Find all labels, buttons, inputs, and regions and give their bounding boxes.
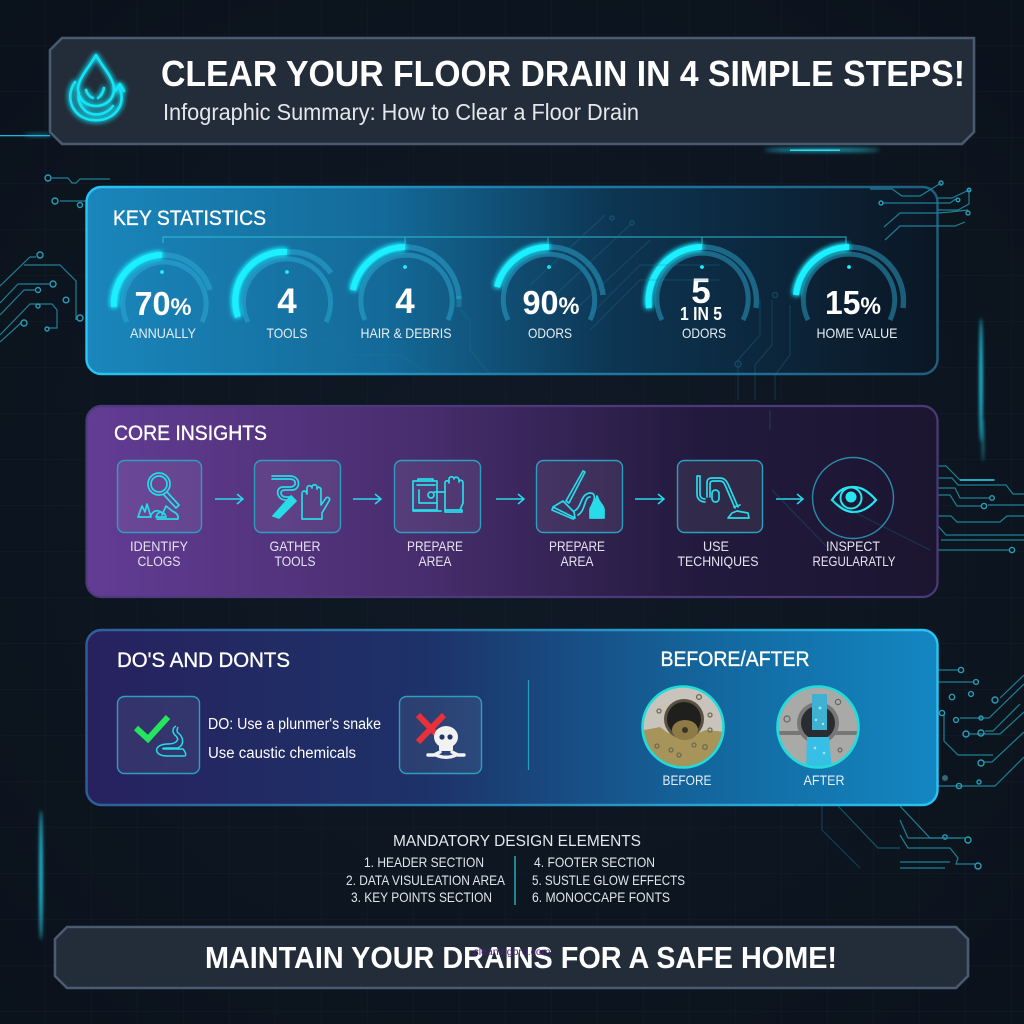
panel: key statistics [86, 187, 938, 374]
image: before drain [640, 685, 726, 788]
header panel [50, 38, 974, 144]
stat: 5, 1 in 5 odors: 1 IN 5 [680, 304, 722, 324]
stat: 70% annually [114, 255, 210, 341]
heading: core insights: CORE INSIGHTS [114, 422, 267, 445]
arrow [353, 494, 381, 504]
footer banner: MAINTAIN YOUR DRAINS FOR A SAFE HOME! [205, 940, 837, 975]
stat: 5, 1 in 5 odors: ODORS [682, 325, 726, 341]
heading: before/after: BEFORE/AFTER [660, 648, 810, 671]
stat: 70% annually: ANNUALLY [130, 325, 197, 341]
stat: 90% odors: 90% [522, 284, 580, 321]
stat: 4 hair and debris: HAIR & DEBRIS [360, 325, 452, 341]
heading: key statistics: KEY STATISTICS [113, 207, 266, 230]
arrow [635, 494, 664, 504]
footer banner [55, 927, 968, 988]
image: after drain: AFTER [804, 772, 844, 788]
subtitle: Infographic Summary: How to Clear a Floor Drain [163, 99, 639, 125]
step: inspect regularly: REGULARATLY [812, 553, 896, 569]
stat: 4 tools [235, 252, 331, 341]
section: mandatory design elements: 1. HEADER SECTION [364, 854, 484, 870]
step: prepare area (broom): AREA [560, 553, 594, 569]
stat: 4 tools: 4 [277, 282, 297, 321]
stat: 90% odors [497, 247, 603, 341]
image: after drain [775, 685, 861, 788]
stat: 4 tools: TOOLS [266, 325, 308, 341]
step: prepare area: AREA [418, 553, 452, 569]
watermark: cleaningbro.com [474, 946, 551, 958]
text: do and don't [208, 716, 381, 762]
icon: water drop with swirl [70, 55, 124, 120]
section: mandatory design elements: 4. FOOTER SECTION [534, 854, 655, 870]
title: CLEAR YOUR FLOOR DRAIN IN 4 SIMPLE STEPS! [161, 53, 965, 94]
stat: 15% home value: HOME VALUE [816, 325, 898, 341]
arrow [496, 494, 524, 504]
stat: 90% odors: ODORS [528, 325, 572, 341]
section: mandatory design elements [346, 833, 685, 905]
step: gather tools [254, 460, 340, 569]
circuit traces: faint overlay on panels [320, 215, 930, 806]
step: identify clogs: IDENTIFY [130, 538, 189, 554]
stat: 5, 1 in 5 odors [649, 247, 756, 341]
step: use techniques [678, 460, 762, 569]
heading: do's and donts: DO'S AND DONTS [117, 649, 290, 672]
step: identify clogs [118, 460, 202, 569]
step: use techniques: TECHNIQUES [678, 553, 758, 569]
text: do and don't: DO: Use a plunmer's snake [208, 716, 381, 733]
stat: 15% home value: 15% [825, 284, 881, 321]
step: use techniques: USE [703, 538, 729, 554]
section: mandatory design elements: 5. SUSTLE GLOW EFFECTS [532, 872, 685, 888]
arrow [215, 494, 243, 504]
glow streaks [0, 134, 984, 940]
step: prepare area (broom) [536, 460, 622, 569]
circuit traces: upper right over panel corner [870, 181, 971, 240]
panel: do's and don'ts, before/after [86, 630, 938, 805]
stat: 5, 1 in 5 odors: 5 [691, 272, 711, 311]
stat: 70% annually: 70% [134, 285, 192, 322]
gauge connector line [163, 237, 846, 245]
image: before drain: BEFORE [662, 772, 712, 788]
circuit traces: upper left [0, 175, 110, 342]
step: gather tools: GATHER [270, 538, 320, 554]
section: mandatory design elements: 6. MONOCCAPE FONTS [532, 889, 670, 905]
text: do and don't: Use caustic chemicals [208, 745, 356, 762]
stat: 4 hair and debris [353, 247, 459, 341]
icon: green check with snake [118, 696, 200, 774]
step: prepare area (broom): PREPARE [549, 538, 605, 554]
stat: 15% home value [796, 247, 903, 341]
step: inspect regularly [812, 458, 896, 569]
arrow [776, 494, 803, 504]
step: gather tools: TOOLS [274, 553, 316, 569]
panel: core insights [86, 406, 938, 597]
step: inspect regularly: INSPECT [826, 538, 880, 554]
circuit traces: lower right [822, 667, 1024, 869]
divider [528, 680, 530, 770]
section: mandatory design elements: 3. KEY POINTS SECTION [351, 889, 492, 905]
section: mandatory design elements: 2. DATA VISULEATION AREA [346, 872, 506, 888]
circuit traces: right middle [900, 466, 1024, 553]
icon: red x with skull [400, 696, 482, 774]
step: identify clogs: CLOGS [138, 553, 180, 569]
step: prepare area: PREPARE [407, 538, 463, 554]
stat: 4 hair and debris: 4 [395, 282, 415, 321]
section: mandatory design elements: MANDATORY DESIGN ELEMENTS [393, 833, 641, 850]
step: prepare area [394, 460, 480, 569]
